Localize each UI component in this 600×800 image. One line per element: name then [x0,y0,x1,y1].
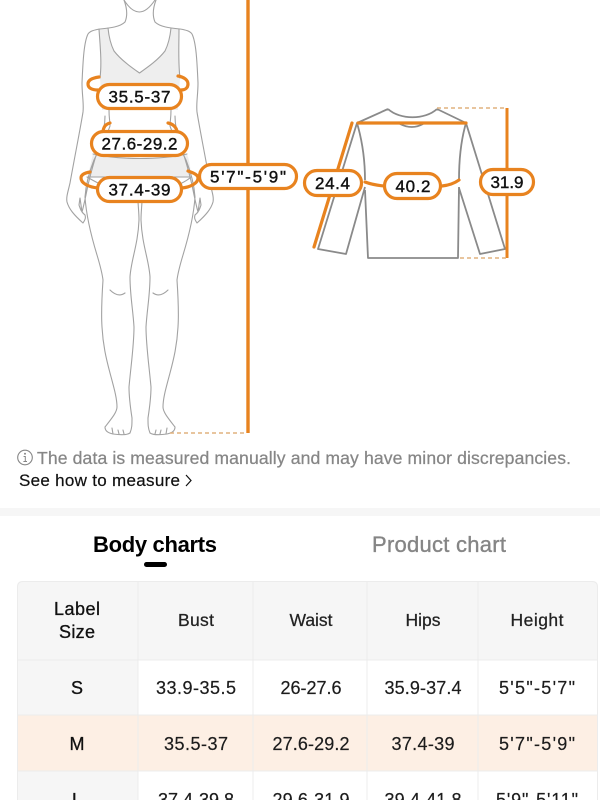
measure link: See how to measure [19,471,180,490]
length value pill: 31.9 [490,173,524,192]
length value pill [480,170,534,194]
camisole top [99,28,180,110]
sleeve line [314,123,352,247]
table header: Bust [178,610,214,630]
bust measurement [88,76,188,108]
lower garment edge lines [87,154,191,184]
row M [70,734,575,754]
tab: body charts: Body charts [93,532,217,557]
length line [506,108,508,258]
right body outline [141,0,213,435]
row M: 5'7"-5'9" [499,734,575,754]
table header: Size [59,622,95,642]
row M: 27.6-29.2 [272,734,350,754]
sleeve value pill: 24.4 [315,174,350,193]
camisole edge lines [99,28,180,78]
shoulder line [358,121,466,125]
body figure illustration [67,0,213,435]
shirt measurements [304,108,534,258]
row S: 26-27.6 [280,678,342,698]
height measurement [170,0,296,433]
sleeve value pill [304,170,362,196]
table header: Label [54,599,100,619]
lower garment [88,154,190,177]
icon: info [18,450,32,465]
section divider band [0,508,600,516]
table header: Hips [406,610,441,630]
table header: Height [510,610,564,630]
disclaimer text: The data is measured manually and may have minor discrepancies. [37,448,571,468]
left body outline [67,0,139,435]
height value pill: 5'7"-5'9" [210,168,286,186]
waist value pill: 27.6-29.2 [102,134,178,154]
waist measurement [92,123,188,156]
row M: 37.4-39 [392,734,454,754]
highlighted row M background [17,715,598,771]
chin and knees and toes [110,0,168,434]
row S: 33.9-35.5 [156,678,236,698]
row S: 5'5"-5'7" [499,678,575,698]
table header: Waist [290,610,333,630]
row S [71,678,575,698]
row M: 35.5-37 [164,734,228,754]
row S: 35.9-37.4 [384,678,462,698]
table header [54,599,564,642]
tab: product chart: Product chart [372,532,506,557]
shirt illustration [318,109,505,258]
row L [72,790,578,800]
chest value pill: 40.2 [396,177,430,196]
size table [17,581,598,800]
row M: M [70,734,84,754]
grid lines [17,581,598,800]
chest curve [365,180,459,186]
hips measurement [81,171,198,202]
chest value pill [384,174,440,198]
hips value pill: 37.4-39 [108,180,170,200]
row S: S [71,678,83,698]
table background [17,581,598,800]
bust value pill: 35.5-37 [108,88,170,106]
height value pill [200,164,296,188]
